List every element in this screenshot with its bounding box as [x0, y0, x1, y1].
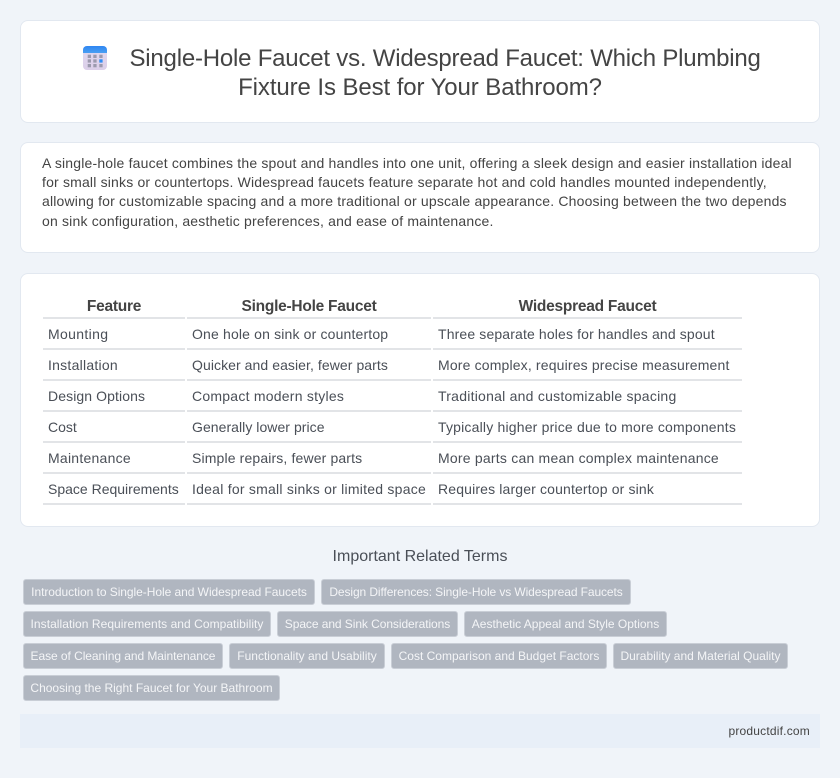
table header row: [87, 298, 656, 315]
row: design options: Compact modern styles: [192, 388, 344, 404]
table header row: Single-Hole Faucet: [241, 298, 377, 315]
heading: related terms: Important Related Terms: [333, 548, 507, 565]
row: maintenance: Simple repairs, fewer parts: [192, 450, 362, 466]
tag: Ease of Cleaning and Maintenance: [31, 649, 215, 663]
table header row: Feature: [87, 298, 141, 315]
tag: Introduction to Single-Hole and Widespread Faucets: [31, 585, 307, 599]
tag: Durability and Material Quality: [620, 649, 781, 663]
row: cost: Cost: [48, 419, 77, 435]
row: mounting: Mounting: [48, 326, 108, 342]
intro paragraph: for small sinks or countertops. Widespread faucets feature separate hot and cold handles mounted independently,: [42, 174, 767, 190]
row: mounting: Three separate holes for handles and spout: [438, 326, 715, 342]
tag: [321, 579, 631, 605]
tag: Choosing the Right Faucet for Your Bathroom: [30, 681, 273, 695]
footer source text: productdif.com: [728, 724, 810, 738]
intro paragraph: A single-hole faucet combines the spout and handles into one unit, offering a sleek design and easier installation ideal: [42, 154, 792, 170]
title: Fixture Is Best for Your Bathroom?: [238, 74, 602, 101]
row: maintenance: More parts can mean complex maintenance: [438, 450, 719, 466]
icon: calendar: [83, 46, 107, 70]
row: installation: More complex, requires precise measurement: [438, 357, 730, 373]
intro paragraph: allowing for customizable spacing and a more traditional or upscale appearance. Choosing between the two depends: [42, 193, 787, 209]
tag: Aesthetic Appeal and Style Options: [472, 617, 659, 631]
tag: [23, 643, 223, 669]
row: space requirements: Requires larger countertop or sink: [438, 481, 654, 497]
intro paragraph: [42, 154, 792, 229]
tag: [23, 611, 271, 637]
row: design options: [48, 388, 676, 404]
panel: comparison table: [20, 273, 820, 527]
tag: [277, 611, 458, 637]
row: installation: Quicker and easier, fewer parts: [192, 357, 388, 373]
footer bar: [20, 714, 820, 748]
row: space requirements: Space Requirements: [48, 481, 179, 497]
row: design options: Traditional and customizable spacing: [438, 388, 676, 404]
panel: introduction text: [20, 142, 820, 253]
row: maintenance: Maintenance: [48, 450, 131, 466]
title: [130, 45, 761, 101]
row: installation: Installation: [48, 357, 118, 373]
tag: Space and Sink Considerations: [285, 617, 450, 631]
row: installation: [48, 357, 730, 373]
panel: title header: [20, 20, 820, 123]
row: maintenance: [48, 450, 719, 466]
tag: Design Differences: Single-Hole vs Widespread Faucets: [329, 585, 623, 599]
tag: [229, 643, 385, 669]
row: mounting: [48, 326, 715, 342]
tag: Installation Requirements and Compatibility: [31, 617, 263, 631]
related term tags: [23, 579, 788, 701]
table header row: Widespread Faucet: [519, 298, 656, 315]
row: design options: Design Options: [48, 388, 145, 404]
title: Single-Hole Faucet vs. Widespread Faucet: Which Plumbing: [130, 45, 761, 72]
tag: Cost Comparison and Budget Factors: [399, 649, 599, 663]
row: cost: Typically higher price due to more components: [438, 419, 736, 435]
row: cost: Generally lower price: [192, 419, 325, 435]
intro paragraph: on sink configuration, aesthetic preferences, and ease of maintenance.: [42, 213, 494, 229]
tag: Functionality and Usability: [237, 649, 377, 663]
row: space requirements: [48, 481, 654, 497]
tag: [613, 643, 788, 669]
row: mounting: One hole on sink or countertop: [192, 326, 388, 342]
row: cost: [48, 419, 736, 435]
tag: [23, 579, 315, 605]
tag: [23, 675, 280, 701]
row: space requirements: Ideal for small sinks or limited space: [192, 481, 426, 497]
tag: [391, 643, 607, 669]
tag: [464, 611, 667, 637]
